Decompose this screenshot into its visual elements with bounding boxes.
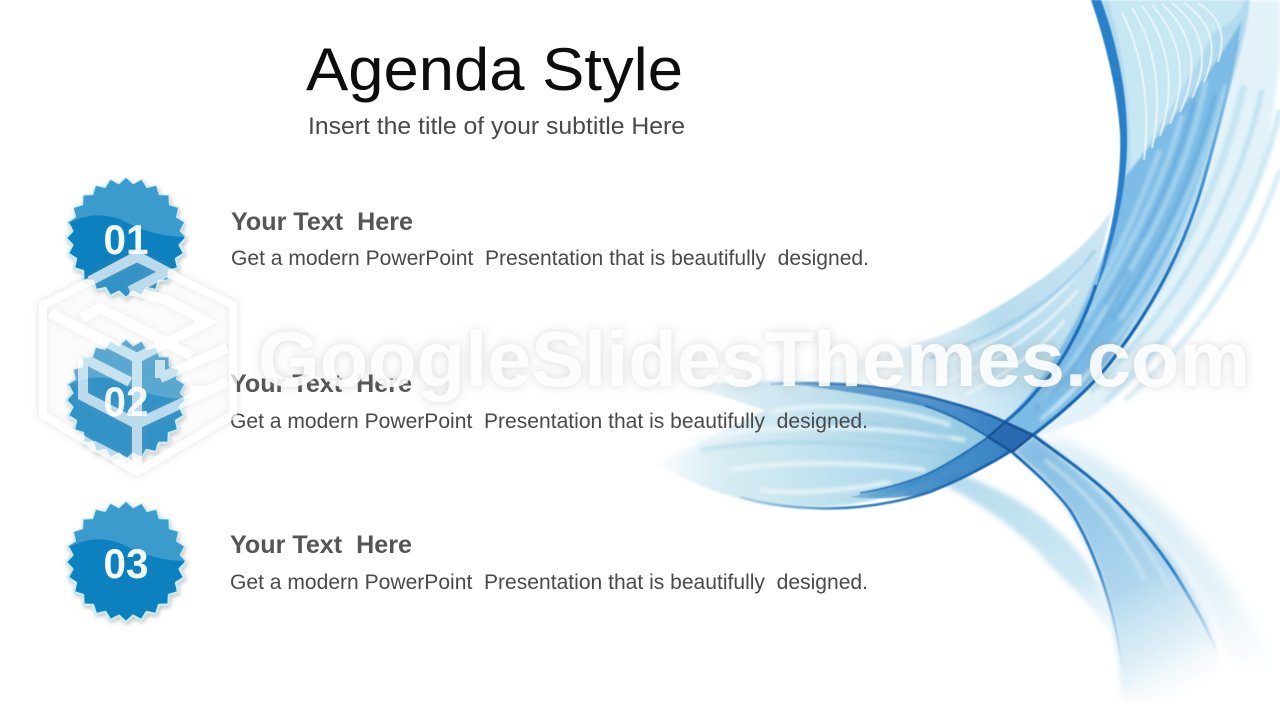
wave: pale outer strands on the right	[1035, 0, 1280, 437]
badge 01: 01	[104, 216, 148, 263]
item 03 description: Get a modern PowerPoint Presentation that is beautifully designed.	[230, 571, 868, 594]
subtitle: Insert the title of your subtitle Here	[308, 113, 685, 140]
badge 01	[64, 177, 190, 302]
watermark text: GoogleSlidesThemes.com	[258, 315, 1250, 403]
wave: soft streaks in the ribbon body	[1035, 80, 1226, 420]
item 02 heading: Your Text Here	[230, 370, 412, 398]
badge 03: 03	[104, 540, 148, 587]
item 03 heading: Your Text Here	[230, 531, 412, 559]
wave: pale left wing	[730, 210, 1112, 422]
wave: dark ribbon edges and crossing	[740, 0, 1238, 665]
title: Agenda Style	[306, 36, 683, 103]
watermark logo: cube	[43, 256, 233, 472]
wave: fine pale lines at the ribbon top	[1122, 3, 1222, 160]
badge 03	[64, 501, 190, 626]
item 02 description: Get a modern PowerPoint Presentation that is beautifully designed.	[230, 410, 868, 433]
wave: lower right ribbon	[935, 433, 1275, 700]
item 01 description: Get a modern PowerPoint Presentation that is beautifully designed.	[231, 247, 869, 270]
wave: lower left ribbon	[650, 381, 990, 507]
badge 02: 02	[104, 378, 148, 425]
decorative blue wave ribbons	[650, 0, 1280, 700]
item 01 heading: Your Text Here	[231, 208, 413, 236]
agenda item 02	[56, 330, 868, 460]
badge 02	[64, 339, 188, 462]
wave: upper ribbon body	[1005, 0, 1250, 435]
agenda item 03	[56, 492, 868, 622]
agenda item 01	[56, 168, 869, 298]
wave: soft streaks in the lower left ribbon	[690, 406, 965, 492]
